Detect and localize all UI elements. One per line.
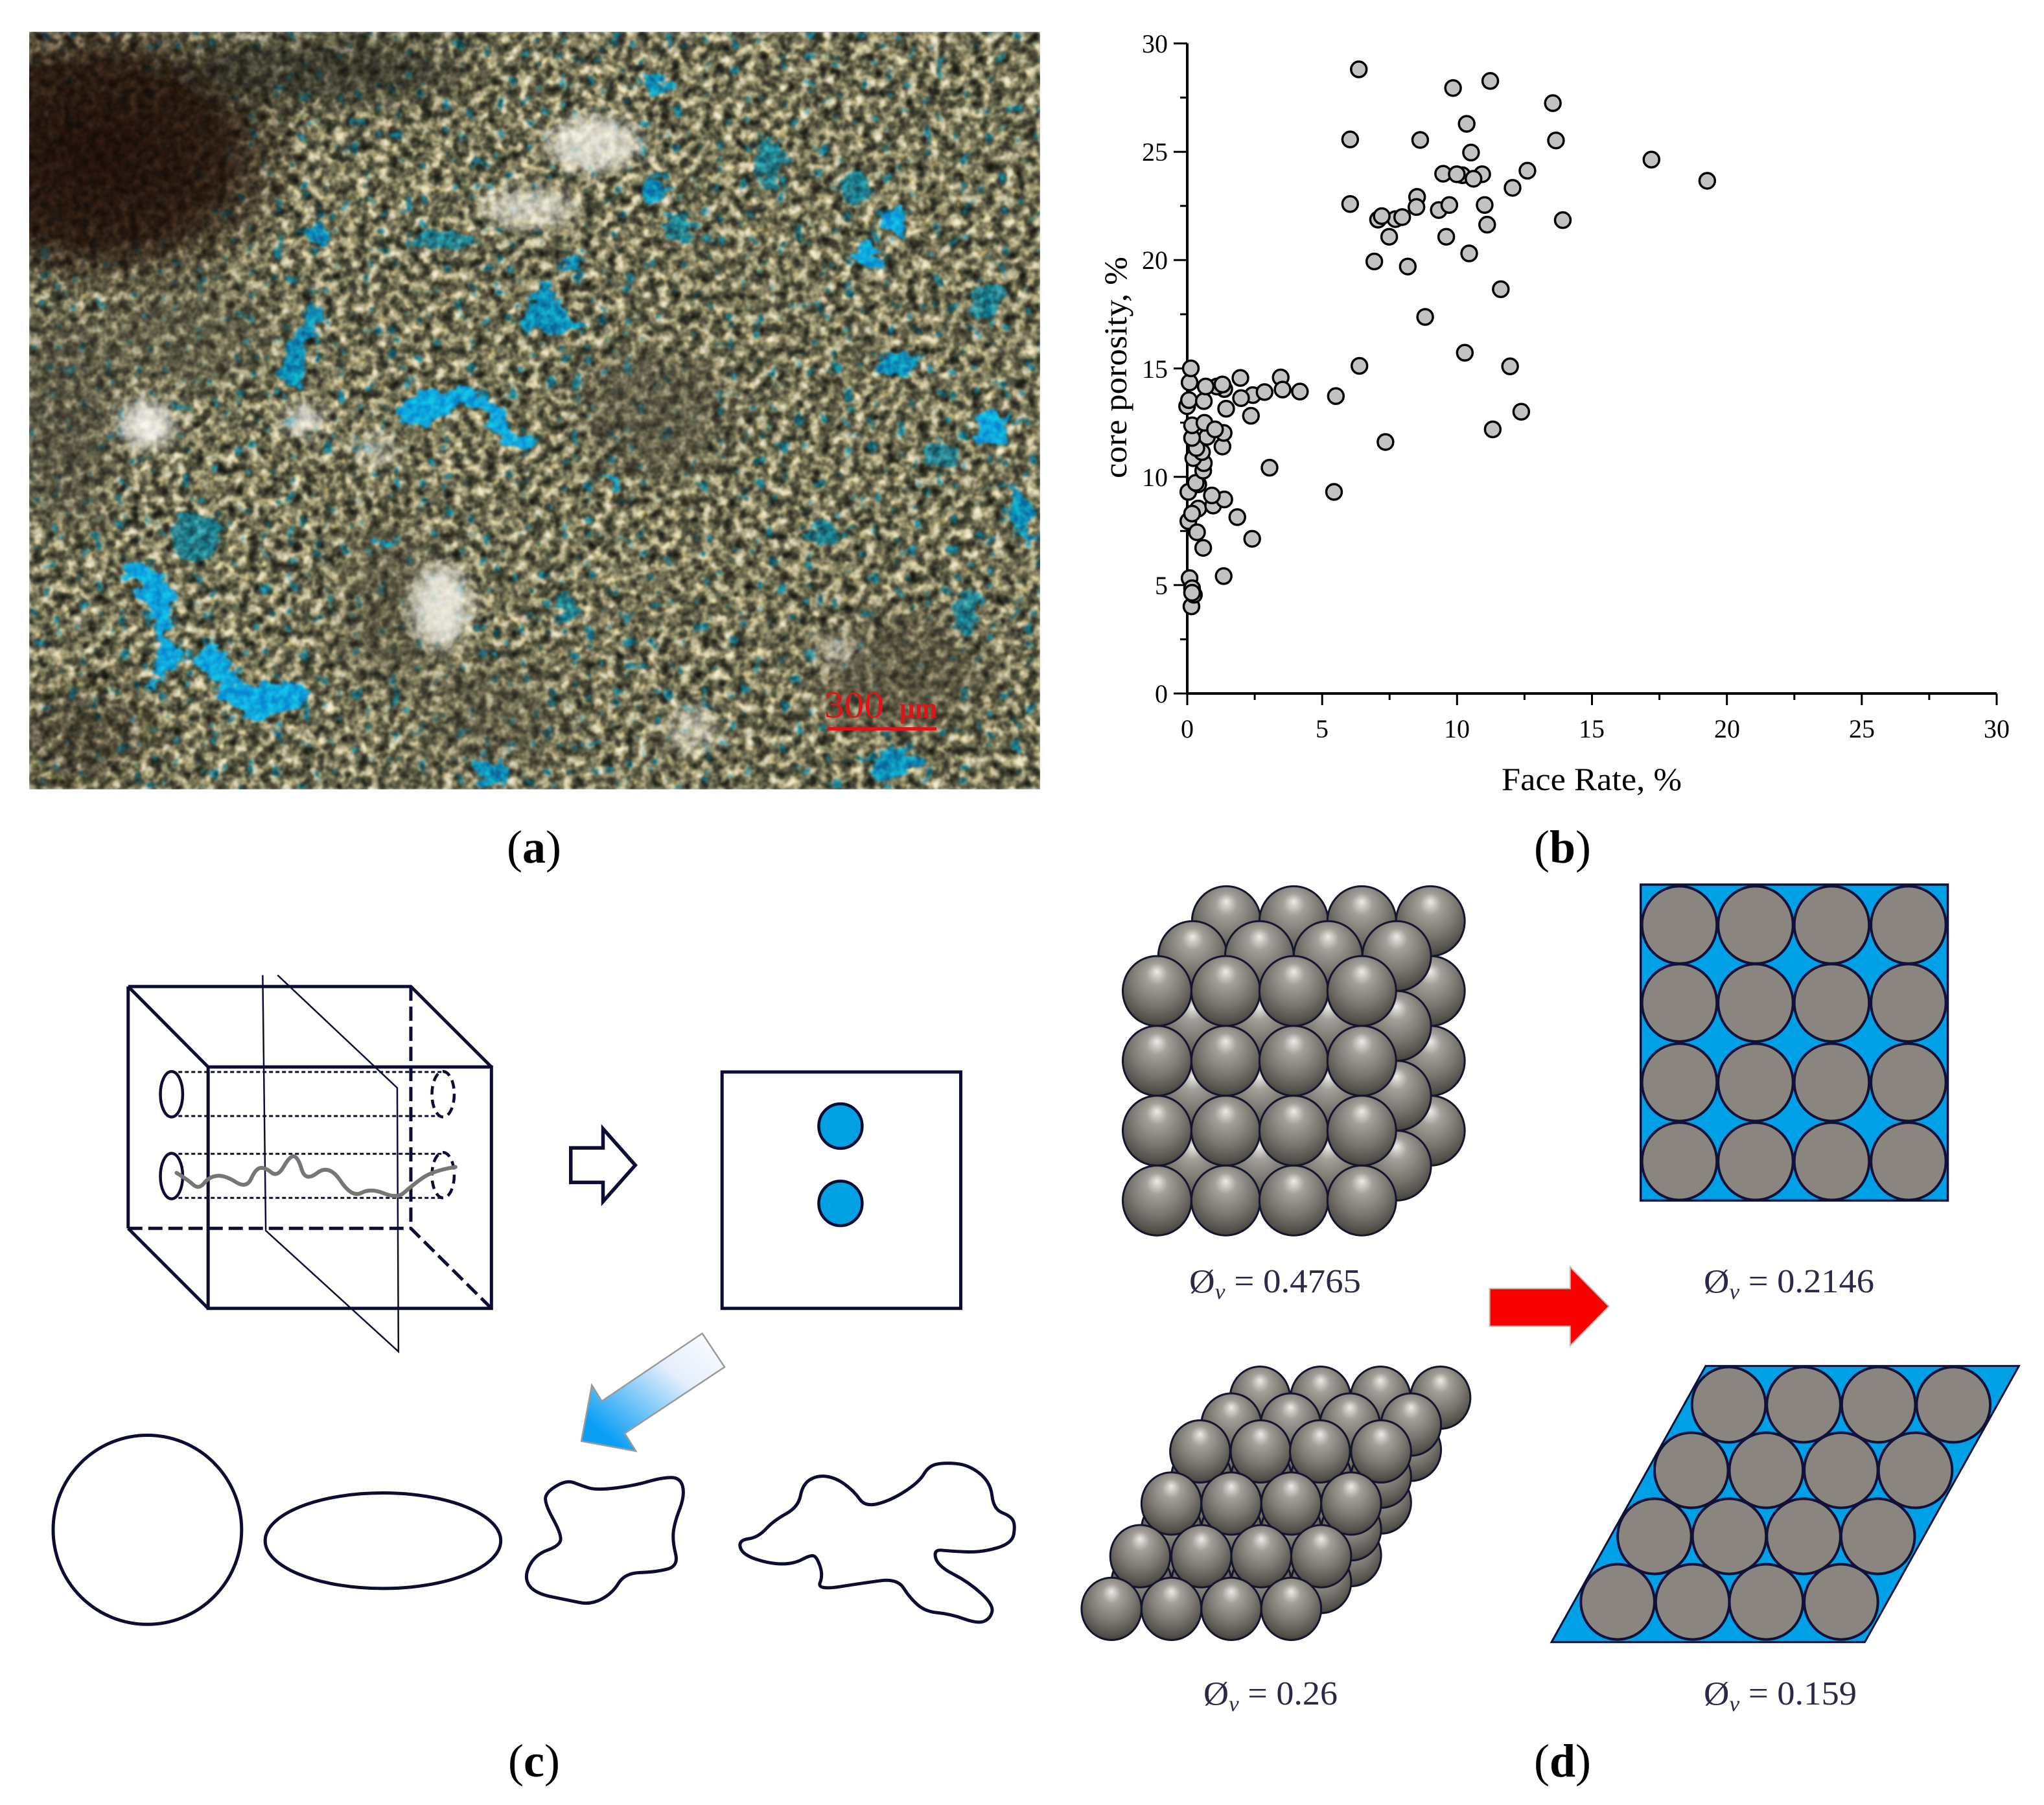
y tick labels: 5 — [1155, 571, 1168, 600]
formula: flat rhombohedral porosity: = 0.159 — [1739, 1675, 1857, 1712]
formula: rhombohedral pack porosity: = 0.26 — [1239, 1675, 1338, 1712]
scale bar — [826, 692, 937, 730]
cross-section square — [722, 1072, 960, 1309]
y tick labels: 25 — [1142, 137, 1168, 167]
formula: rhombohedral pack porosity: v — [1229, 1692, 1240, 1716]
gradient arrow — [581, 1333, 725, 1451]
hollow arrow — [571, 1129, 635, 1202]
cubic sphere pack — [1122, 886, 1465, 1235]
label b: (b) — [1534, 821, 1591, 873]
formula: flat rhombohedral porosity: v — [1729, 1692, 1740, 1716]
flat rhombohedral section — [1551, 1366, 2019, 1642]
x tick labels: 20 — [1714, 714, 1740, 743]
panel d: sphere packing — [1082, 885, 2019, 1642]
y tick labels: 30 — [1142, 29, 1168, 58]
panel c: pore cross-section schematic — [53, 975, 1014, 1624]
x tick labels — [1181, 714, 2010, 743]
pore shape: irregular — [526, 1478, 683, 1603]
x tick labels: 0 — [1181, 714, 1194, 743]
formula: rhombohedral pack porosity: Ø — [1203, 1675, 1228, 1712]
x tick labels: 5 — [1316, 714, 1329, 743]
y tick labels: 10 — [1142, 463, 1168, 492]
y tick labels: 15 — [1142, 355, 1168, 384]
x axis title: Face Rate, % — [1502, 761, 1682, 797]
axes — [1187, 43, 1997, 693]
formula: flat rhombohedral porosity: Ø — [1704, 1675, 1728, 1712]
y tick labels: 0 — [1155, 679, 1168, 708]
label c: (c) — [508, 1735, 560, 1787]
x tick labels: 15 — [1579, 714, 1605, 743]
x tick labels: 30 — [1984, 714, 2010, 743]
y axis title: core porosity, % — [1097, 257, 1133, 478]
formula: flat cubic porosity: v — [1729, 1280, 1740, 1304]
data points — [1179, 62, 1715, 614]
label d: (d) — [1534, 1735, 1591, 1787]
scale bar: 300 — [824, 684, 884, 726]
flat cubic section — [1641, 885, 1948, 1200]
formula: cubic pack porosity: Ø — [1189, 1263, 1214, 1300]
formula: flat cubic porosity: Ø — [1704, 1263, 1728, 1300]
formula: cubic pack porosity: v — [1215, 1280, 1226, 1304]
pore shape: ellipse — [265, 1493, 501, 1589]
panel a: thin-section micrograph — [0, 6, 1040, 789]
scale bar: µm — [900, 692, 937, 724]
x tick labels: 10 — [1444, 714, 1470, 743]
rhombohedral sphere pack — [1082, 1366, 1470, 1640]
formula: cubic pack porosity: = 0.4765 — [1225, 1263, 1361, 1300]
x tick labels: 25 — [1849, 714, 1875, 743]
panel b: scatter chart — [1097, 29, 2010, 797]
cube with tubes — [128, 975, 491, 1351]
pore shape: circle — [53, 1435, 242, 1624]
pore shape: complex irregular — [740, 1463, 1014, 1622]
y tick labels: 20 — [1142, 246, 1168, 275]
formula: flat cubic porosity: = 0.2146 — [1739, 1263, 1874, 1300]
y tick labels — [1142, 29, 1168, 708]
label a: (a) — [507, 821, 561, 873]
red arrow — [1490, 1267, 1609, 1345]
